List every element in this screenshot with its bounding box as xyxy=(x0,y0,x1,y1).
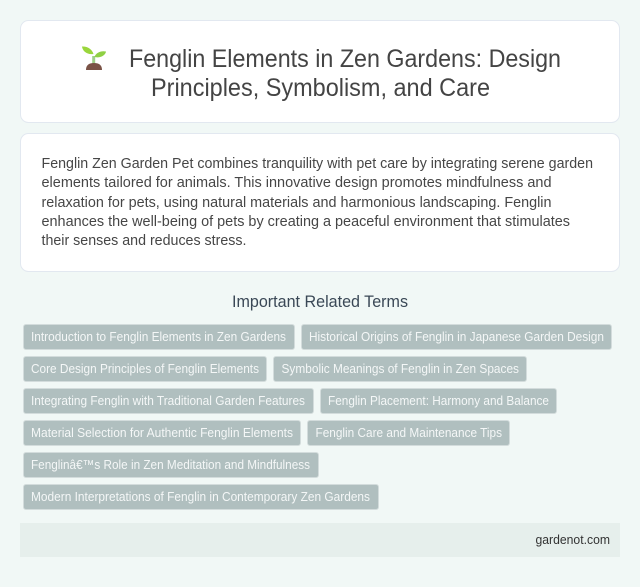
tag: care and maintenance xyxy=(308,420,510,446)
tag: introduction xyxy=(24,324,294,350)
tag: historical origins: Historical Origins of Fenglin in Japanese Garden Design xyxy=(309,329,604,344)
text block: description: elements tailored for animals. This innovative design promotes mindfulness and xyxy=(42,175,552,191)
footer: gardenot.com xyxy=(536,532,610,547)
panel: related term tags xyxy=(24,324,612,510)
panel: description xyxy=(20,134,620,272)
tag: modern interpretations xyxy=(24,484,378,510)
tag: introduction: Introduction to Fenglin Elements in Zen Gardens xyxy=(31,329,286,344)
tag: modern interpretations: Modern Interpretations of Fenglin in Contemporary Zen Gardens xyxy=(31,489,370,504)
heading: title: Fenglin Elements in Zen Gardens: Design xyxy=(129,45,561,73)
text block: description: relaxation for pets, using natural materials and harmonious landscaping. Fenglin xyxy=(42,195,552,211)
panel: title xyxy=(20,20,620,122)
tag: core design principles xyxy=(24,356,266,382)
text block: description: enhances the well-being of pets by creating a peaceful environment that stimulates xyxy=(42,214,570,230)
tag: material selection xyxy=(24,420,300,446)
footer xyxy=(20,523,620,557)
tag: placement xyxy=(320,388,556,414)
tag: placement: Fenglin Placement: Harmony and Balance xyxy=(328,393,549,408)
icon: sprout xyxy=(82,46,106,70)
heading: title: Principles, Symbolism, and Care xyxy=(151,74,490,102)
tag: core design principles: Core Design Principles of Fenglin Elements xyxy=(31,361,259,376)
heading: title xyxy=(129,45,561,102)
tag: integrating fenglin xyxy=(24,388,314,414)
heading: related terms: Important Related Terms xyxy=(232,293,408,311)
tag: integrating fenglin: Integrating Fenglin with Traditional Garden Features xyxy=(31,393,305,408)
tag: meditation role: Fenglinâ€™s Role in Zen Meditation and Mindfulness xyxy=(31,457,310,472)
tag: care and maintenance: Fenglin Care and Maintenance Tips xyxy=(316,425,502,440)
text block: description xyxy=(42,156,593,249)
tag: historical origins xyxy=(302,324,612,350)
tag: symbolic meanings: Symbolic Meanings of Fenglin in Zen Spaces xyxy=(282,361,519,376)
tag: material selection: Material Selection for Authentic Fenglin Elements xyxy=(31,425,293,440)
tag: meditation role xyxy=(24,452,318,478)
text block: description: their senses and reduces stress. xyxy=(42,233,246,249)
text block: description: Fenglin Zen Garden Pet combines tranquility with pet care by integrating serene garden xyxy=(42,156,593,172)
tag: symbolic meanings xyxy=(274,356,526,382)
